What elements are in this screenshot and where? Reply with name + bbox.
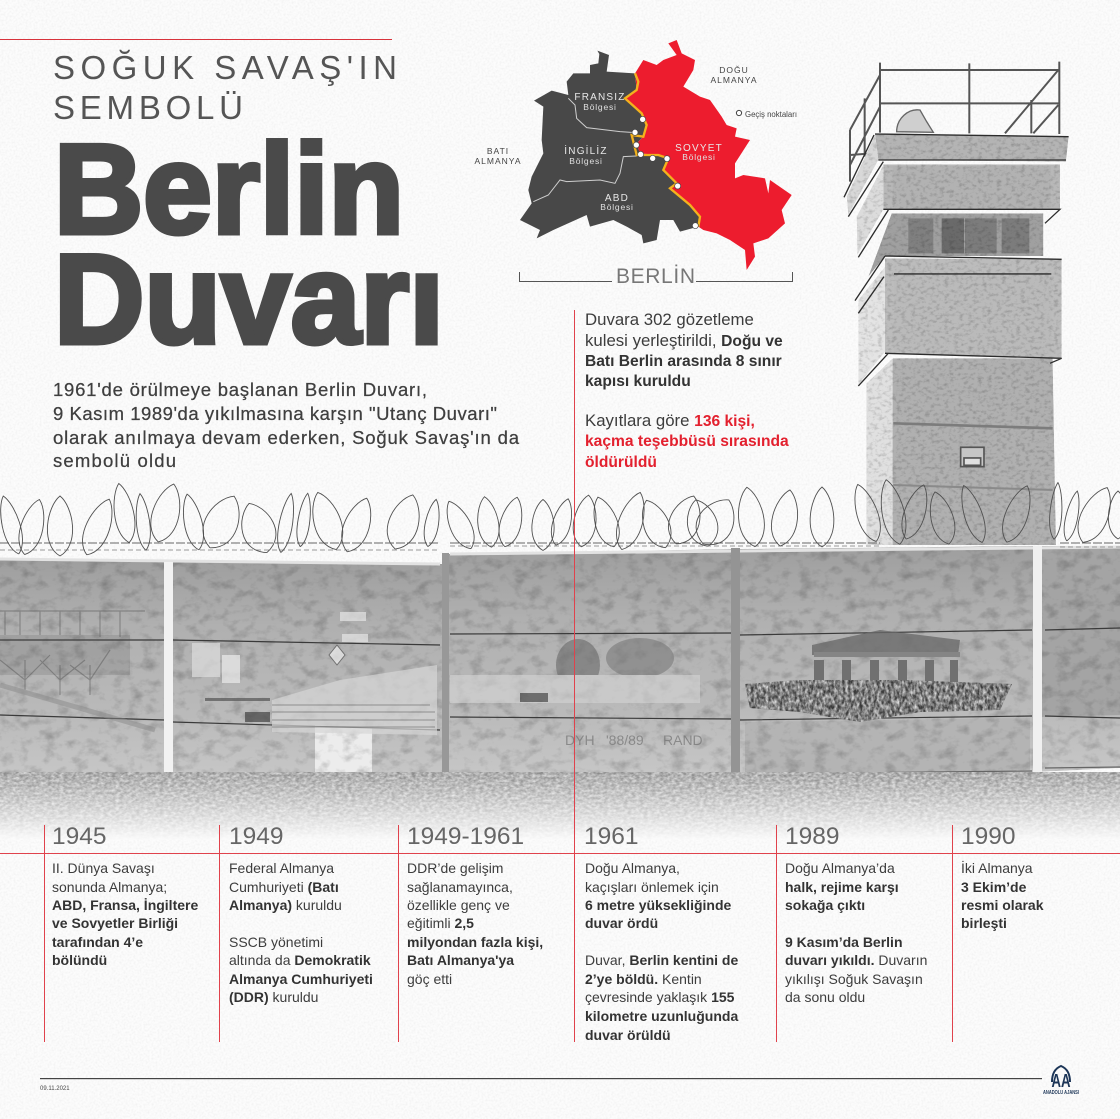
wall line <box>625 73 700 227</box>
timeline: 1961: kilometre uzunluğunda <box>585 1008 738 1024</box>
timeline: 1949-1961: özellikle genç ve <box>407 897 510 913</box>
timeline: 1949: Almanya Cumhuriyeti <box>229 971 373 987</box>
timeline: 1990: 1990 <box>961 823 1016 850</box>
timeline: 1961: 1961 <box>584 823 639 850</box>
timeline: 1949-1961 <box>398 823 543 1042</box>
intro paragraph: 9 Kasım 1989'da yıkılmasına karşın "Utanç Duvarı" <box>53 403 497 424</box>
intro paragraph: 1961'de örülmeye başlanan Berlin Duvarı, <box>53 379 427 400</box>
timeline: 1949: Almanya) kuruldu <box>229 897 342 913</box>
timeline: 1990: İki Almanya <box>961 859 1033 876</box>
timeline: 1961 <box>584 823 738 1043</box>
intro paragraph: olarak anılmaya devam ederken, Soğuk Savaş'ın da <box>53 427 520 448</box>
timeline: 1949-1961: DDR’de gelişim <box>407 860 503 876</box>
ground <box>0 772 1120 840</box>
logo: Anadolu Ajansı <box>1043 1066 1079 1096</box>
map labels: Bölgesi <box>583 102 617 112</box>
intro paragraph: sembolü oldu <box>53 450 176 471</box>
timeline: 1945: sonunda Almanya; <box>52 879 167 895</box>
timeline: 1989 <box>776 823 927 1042</box>
map caption: BERLİN <box>520 265 792 288</box>
timeline: 1990 <box>952 823 1044 1042</box>
timeline: 1949: (DDR) kuruldu <box>229 989 318 1005</box>
map labels: Bölgesi <box>600 202 634 212</box>
timeline: 1961: çevresinde yaklaşık 155 <box>585 989 735 1005</box>
legend: crossing points: Geçiş noktaları <box>745 110 797 119</box>
map labels: ALMANYA <box>710 75 758 85</box>
title: Berlin Duvarı: Berlin <box>54 118 404 260</box>
timeline: 1989: halk, rejime karşı <box>785 879 899 895</box>
timeline: 1990: birleşti <box>961 915 1007 931</box>
timeline: 1949: 1949 <box>229 823 284 850</box>
map labels: DOĞU <box>719 65 749 75</box>
date: 09.11.2021 <box>40 1086 70 1092</box>
timeline: 1990: resmi olarak <box>961 897 1044 913</box>
timeline axis <box>0 853 1120 854</box>
mural: street barricade <box>192 612 437 735</box>
timeline: 1961: 2’ye böldü. Kentin <box>585 971 702 987</box>
title: Berlin Duvarı: Duvarı <box>54 228 444 370</box>
timeline: 1945: II. Dünya Savaşı <box>52 860 155 876</box>
timeline: 1945: bölündü <box>52 952 107 968</box>
footer rule <box>40 1078 1042 1079</box>
logo: Anadolu Ajansı: ANADOLU AJANSI <box>1043 1090 1079 1096</box>
timeline: 1945: tarafından 4’e <box>52 934 143 950</box>
map labels: Bölgesi <box>569 156 603 166</box>
razor wire <box>0 477 1120 559</box>
map labels: ABD <box>605 193 629 204</box>
western sectors <box>520 51 700 243</box>
map labels: ALMANYA <box>474 156 522 166</box>
callout: watchtowers and gates <box>585 310 783 390</box>
timeline: 1949: Cumhuriyeti (Batı <box>229 879 339 895</box>
wall panels <box>0 546 1120 782</box>
timeline: 1989: duvarı yıkıldı. Duvarın <box>785 952 927 968</box>
timeline: 1945 <box>44 823 198 1042</box>
timeline: 1949-1961: eğitimli 2,5 <box>407 915 474 931</box>
map labels: BATI <box>487 146 509 156</box>
Soviet sector <box>625 40 792 270</box>
wall posts <box>164 546 1042 782</box>
map of Berlin <box>474 40 797 288</box>
callout: casualties: öldürüldü <box>585 454 657 471</box>
title: Berlin Duvarı <box>54 118 444 370</box>
timeline: 1945: ve Sovyetler Birliği <box>52 915 178 931</box>
map labels <box>474 65 758 212</box>
map shapes <box>520 40 792 270</box>
callout: watchtowers and gates: Duvara 302 gözetleme <box>585 310 754 329</box>
callout: watchtowers and gates: kapısı kuruldu <box>585 373 691 390</box>
timeline: 1961: Duvar, Berlin kentini de <box>585 952 738 968</box>
watchtower <box>844 62 1069 545</box>
callout: casualties: Kayıtlara göre 136 kişi, <box>585 411 755 430</box>
timeline: 1961: duvar örüldü <box>585 1027 671 1043</box>
timeline: 1949-1961: 1949-1961 <box>407 823 524 850</box>
vertical red line <box>574 310 575 1042</box>
timeline: 1945: 1945 <box>52 823 107 850</box>
title: kicker: SEMBOLÜ <box>53 89 243 126</box>
graffiti <box>565 732 703 748</box>
timeline: 1949: altında da Demokratik <box>229 952 371 968</box>
intro paragraph <box>53 379 520 471</box>
callout: casualties: kaçma teşebbüsü sırasında <box>585 433 789 450</box>
map labels: FRANSIZ <box>574 92 626 103</box>
mural: Brandenburg Gate and crowd <box>745 630 1012 722</box>
graffiti: DYH <box>565 732 595 748</box>
timeline: 1949 <box>219 823 373 1042</box>
timeline: 1949: Federal Almanya <box>229 860 334 876</box>
timeline: 1949-1961: milyondan fazla kişi, <box>407 934 543 950</box>
timeline: 1989: 9 Kasım’da Berlin <box>785 934 902 950</box>
timeline: 1989: sokağa çıktı <box>785 897 865 913</box>
tower body <box>847 134 1069 545</box>
crossing points <box>632 116 698 229</box>
logo: Anadolu Ajansı: AA <box>1052 1071 1070 1091</box>
concrete wall <box>0 546 1120 782</box>
timeline: 1989: da sonu oldu <box>785 989 865 1005</box>
mural: left fence <box>0 611 155 730</box>
timeline: 1949-1961: göç etti <box>407 971 452 987</box>
timeline: 1961: kaçışları önlemek için <box>585 879 719 895</box>
timeline: 1949: SSCB yönetimi <box>229 934 323 950</box>
callout: casualties <box>585 411 789 471</box>
timeline: 1949-1961: sağlanamayınca, <box>407 879 513 895</box>
timeline: 1945: ABD, Fransa, İngiltere <box>52 897 198 913</box>
timeline: 1990: 3 Ekim’de <box>961 879 1027 895</box>
tower railing <box>850 62 1059 182</box>
title: kicker <box>53 49 397 126</box>
searchlight <box>897 110 933 132</box>
top accent line <box>0 39 392 40</box>
mural: trees and tank <box>450 638 700 703</box>
tower hatch <box>961 447 984 467</box>
title: kicker: SOĞUK SAVAŞ'IN <box>53 49 397 86</box>
timeline: 1989: 1989 <box>785 823 840 850</box>
timeline: 1949-1961: Batı Almanya'ya <box>407 952 514 968</box>
wall seams <box>0 547 1120 781</box>
timeline: 1989: yıkılışı Soğuk Savaşın <box>785 971 923 987</box>
map labels: SOVYET <box>675 143 723 154</box>
timeline: 1961: duvar ördü <box>585 915 658 931</box>
map labels: Bölgesi <box>682 152 716 162</box>
timeline: 1961: 6 metre yüksekliğinde <box>585 897 732 913</box>
graffiti: '88/89 <box>606 732 644 748</box>
map caption: BERLİN: BERLİN <box>616 265 695 288</box>
graffiti: RAND <box>663 732 703 748</box>
map labels: İNGİLİZ <box>564 144 608 157</box>
callout: watchtowers and gates: kulesi yerleştirildi, Doğu ve <box>585 331 783 350</box>
timeline: 1989: Doğu Almanya’da <box>785 860 895 876</box>
callout: watchtowers and gates: Batı Berlin arasında 8 sınır <box>585 353 782 370</box>
timeline: 1961: Doğu Almanya, <box>585 860 680 876</box>
sector boundaries <box>533 98 637 202</box>
